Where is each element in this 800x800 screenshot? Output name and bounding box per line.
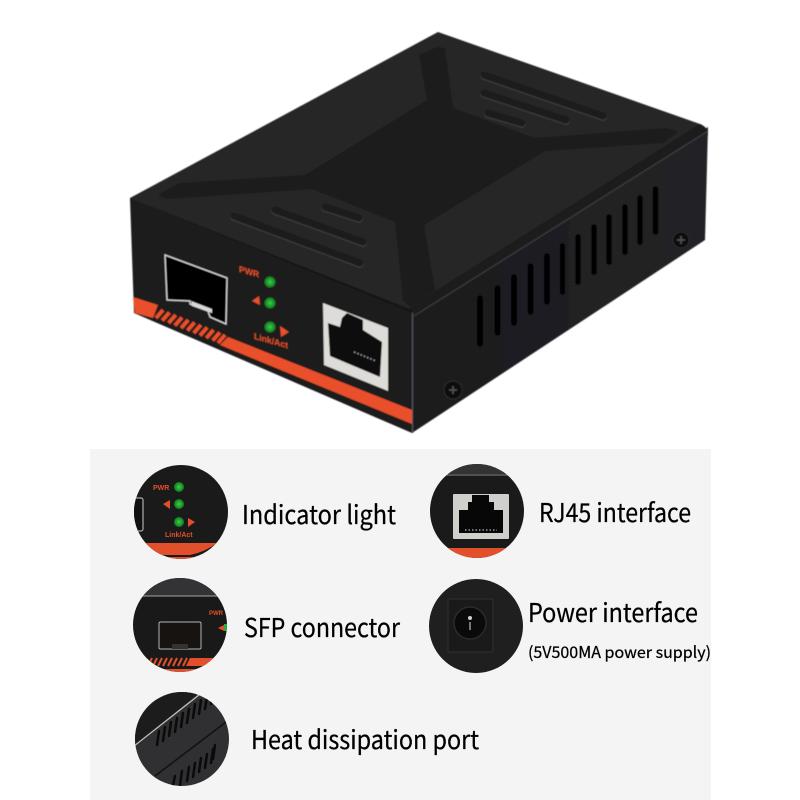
top face (130, 32, 708, 316)
icon: heat dissipation port (134, 692, 229, 786)
icon: RJ45 interface (430, 464, 524, 560)
panel: feature legend (90, 449, 711, 800)
SFP port (165, 255, 227, 324)
hatch marks (156, 310, 225, 343)
label: power interface: Power interface (528, 593, 698, 630)
icon: SFP connector (133, 578, 228, 673)
product photo: media converter (130, 32, 708, 433)
feature: indicator light (130, 465, 396, 560)
front face (130, 198, 412, 433)
LED labels: Link/Act (254, 331, 288, 351)
orange stripe (133, 297, 158, 318)
icon: indicator light (130, 465, 228, 560)
label: heat dissipation port: Heat dissipation port (251, 720, 479, 757)
label: RJ45 interface: RJ45 interface (539, 493, 691, 530)
feature: heat dissipation port (134, 692, 479, 786)
label: power supply note: (5V500MA power supply) (528, 639, 711, 663)
right side face (410, 124, 708, 433)
top slots (234, 75, 603, 264)
LED labels (239, 264, 289, 351)
feature: RJ45 interface (430, 464, 691, 560)
label: SFP connector: SFP connector (244, 608, 401, 645)
label: indicator light: Indicator light (242, 495, 396, 532)
icon: SFP connector: PWR (209, 611, 224, 617)
screws (444, 232, 689, 399)
LED labels: PWR (239, 264, 260, 280)
ventilation slots (480, 189, 656, 344)
indicator LEDs (264, 276, 276, 332)
icon: indicator light: PWR (153, 485, 169, 492)
feature: SFP connector (133, 578, 401, 673)
icon: indicator light: Link/Act (165, 532, 193, 539)
RJ45 port (323, 303, 388, 391)
icon: power interface (429, 579, 523, 673)
feature: power interface (429, 579, 711, 673)
